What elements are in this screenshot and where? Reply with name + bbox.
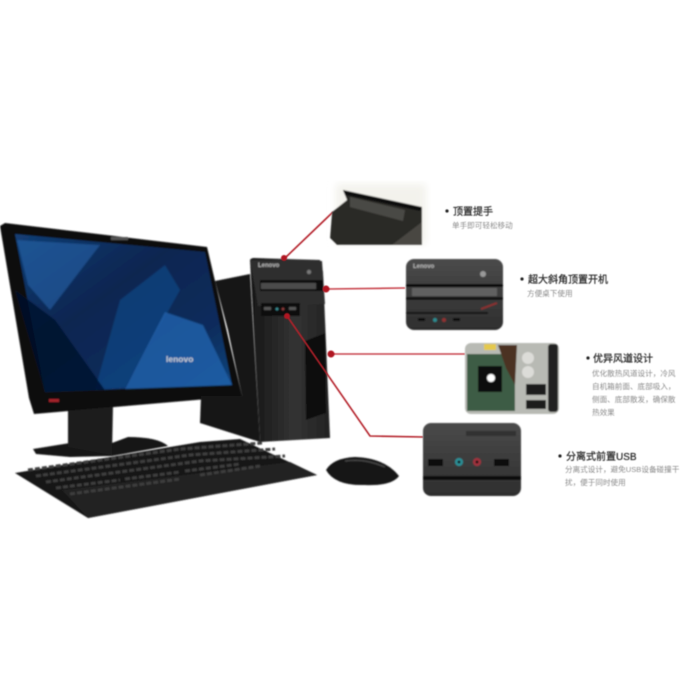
illustration: monitor [0,223,399,518]
tower side [200,274,260,442]
panel: power and optical drive: Lenovo [413,264,435,270]
line: power [328,288,405,289]
panel: power and optical drive [406,259,503,330]
monitor stand [33,405,168,457]
tower logo: Lenovo [258,263,280,269]
screen logo: lenovo [166,354,193,364]
panel: front USB [423,423,521,496]
line: USB [287,316,423,437]
text: airflow: 自机箱前面、底部吸入， [592,381,676,391]
screen light streaks [15,240,232,392]
text: airflow: 优化散热风道设计，冷风 [592,368,676,378]
tower top panel [250,260,325,306]
line: airflow [331,353,465,355]
text: airflow [586,352,676,417]
text: front USB [558,450,680,487]
text: airflow: 侧面、底部散发，确保散 [592,394,676,404]
text: front USB: 分离式设计，避免USB设备碰撞干 [565,464,680,474]
keyboard [15,439,317,518]
line: top handle [285,212,333,258]
tower power button [307,270,311,274]
text: front USB: 扰，便于同时使用 [565,477,626,487]
monitor red badge [49,399,59,402]
tower front [250,258,330,442]
monitor bezel [0,223,242,414]
callout dots [281,255,334,358]
text: top handle: 单手即可轻松移动 [452,220,513,230]
panel: airflow design [465,343,559,414]
text: power: 超大斜角顶置开机 [528,273,608,286]
text: top handle: 顶置提手 [453,205,493,218]
text: power: 方便桌下使用 [527,288,573,298]
panel: top handle [330,184,426,245]
text: top handle [445,205,513,230]
monitor top logo [111,237,128,240]
tower front USB ports [261,303,300,316]
text: airflow: 优异风道设计 [593,352,653,365]
text: front USB: 分离式前置USB [566,450,637,463]
tower optical drive [260,280,323,291]
mouse [326,457,399,485]
monitor screen [15,234,232,392]
tower vent [305,333,326,420]
text: power [520,273,608,298]
text: airflow: 热效果 [592,407,615,417]
callout lines [285,212,465,437]
